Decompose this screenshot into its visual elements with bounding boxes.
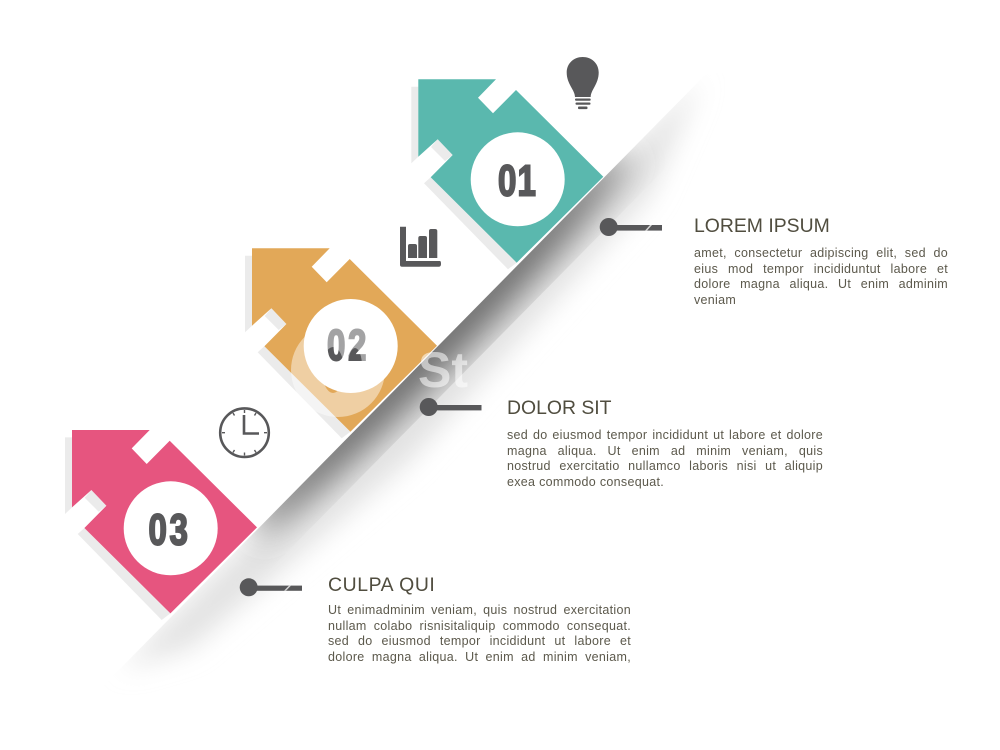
icon: clock: [220, 408, 269, 457]
number badge 01: 01: [498, 157, 537, 206]
text block: lorem ipsum: [694, 215, 948, 306]
icon: bar chart: [400, 227, 441, 267]
body: lorem ipsum: eius mod tempor incididuntut labore et: [694, 262, 948, 276]
body: lorem ipsum: dolore magna aliqua. Ut enim adminim: [694, 277, 948, 291]
connector 01: [600, 218, 662, 236]
body: lorem ipsum: veniam: [694, 292, 736, 306]
body: dolor sit: exea commodo consequat.: [507, 474, 664, 488]
body: culpa qui: [328, 603, 631, 664]
heading: dolor sit: DOLOR SIT: [507, 397, 612, 419]
body: lorem ipsum: [694, 246, 948, 306]
icon: light bulb: [567, 57, 599, 109]
body: culpa qui: nullam colabo risnisitaliquip commodo consequat.: [328, 618, 631, 632]
body: culpa qui: Ut enimadminim veniam, quis nostrud exercitation: [328, 603, 631, 617]
number badge 02: [304, 299, 398, 393]
arrow 02 (orange): [245, 248, 437, 438]
diagonal band shadow: [122, 80, 700, 668]
heading: culpa qui: CULPA QUI: [328, 574, 435, 596]
arrow 03 (pink): [65, 430, 257, 620]
text block: culpa qui: [328, 574, 631, 664]
watermark: [291, 323, 468, 417]
heading: lorem ipsum: LOREM IPSUM: [694, 215, 830, 237]
arrow 01 (teal): [411, 79, 603, 269]
text block: dolor sit: [507, 397, 823, 488]
connector 02: [420, 398, 482, 416]
body: dolor sit: sed do eiusmod tempor incididunt ut labore et dolore: [507, 428, 823, 442]
number badge 03: 03: [148, 506, 191, 555]
number badge 03: [124, 481, 218, 575]
body: lorem ipsum: amet, consectetur adipiscing elit, sed do: [694, 246, 948, 260]
body: culpa qui: dolore magna aliqua. Ut enim ad minim veniam,: [328, 650, 631, 664]
number badge 02: 02: [327, 322, 369, 370]
body: culpa qui: sed do eiusmod tempor incididunt ut labore et: [328, 634, 631, 648]
body: dolor sit: nostrud exercitatio nullamco laboris nisi ut aliquip: [507, 459, 823, 473]
body: dolor sit: magna aliqua. Ut enim ad minim veniam, quis: [507, 444, 823, 458]
connector 03: [240, 578, 302, 596]
body: dolor sit: [507, 428, 823, 488]
watermark: St: [418, 342, 468, 398]
number badge 01: [471, 132, 565, 226]
